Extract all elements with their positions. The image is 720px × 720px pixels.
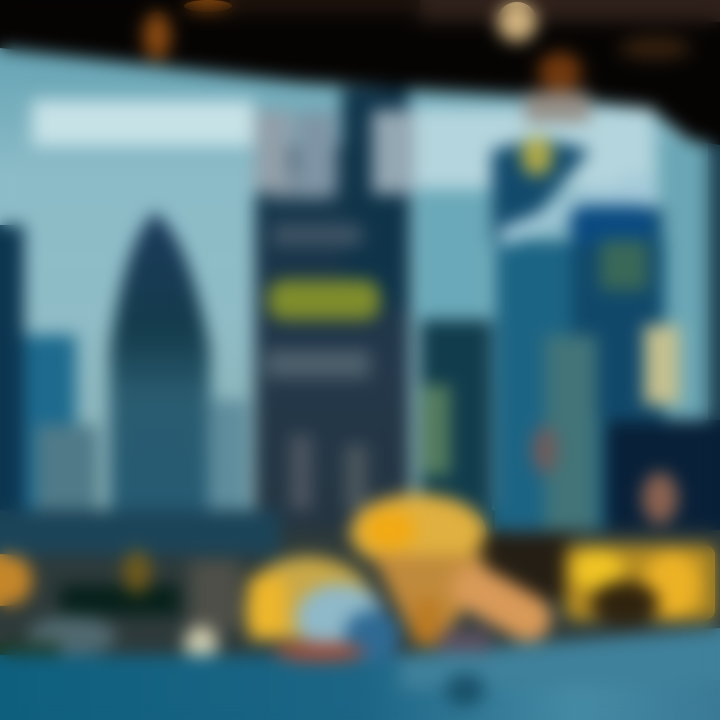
bottom water band (0, 628, 720, 720)
central left tower (110, 212, 248, 550)
central dark building (255, 88, 410, 545)
title band right (372, 92, 654, 194)
worker figure: left hard hat and blue shirt (245, 556, 400, 662)
small lights left (0, 550, 218, 660)
dark sign panel right (605, 420, 720, 540)
sky background (0, 30, 720, 560)
left building (0, 225, 98, 545)
middle right low buildings (420, 320, 558, 535)
yellow machinery right (565, 545, 715, 625)
right tower (492, 136, 680, 540)
title band left (32, 100, 337, 194)
lower street band (0, 510, 720, 658)
dark ceiling band with lights (0, 0, 720, 145)
worker figure: main yellow hard hat and arm (350, 494, 528, 652)
green highlighted label (268, 280, 380, 320)
